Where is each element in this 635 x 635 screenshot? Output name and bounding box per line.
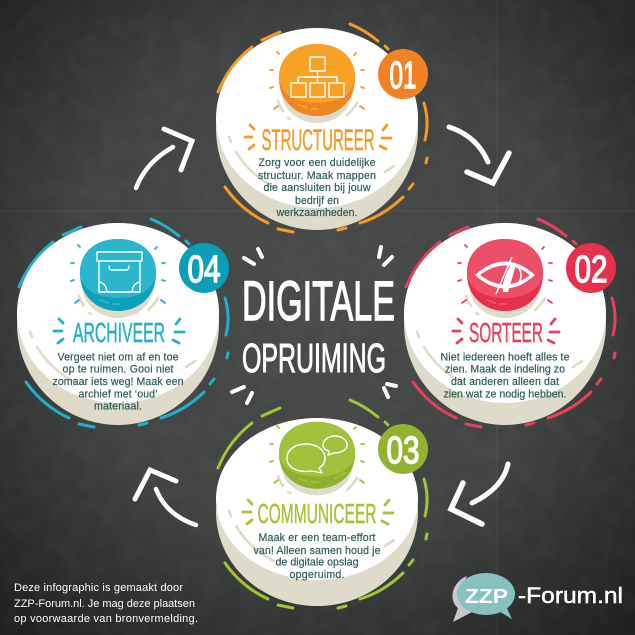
arrow: bottom right (451, 464, 508, 524)
plate (404, 223, 606, 425)
plate marks (229, 101, 394, 187)
heading rays (243, 500, 393, 524)
orange dashed ring (218, 24, 427, 232)
red dashed ring (406, 219, 615, 427)
logo text: ZZP (465, 586, 508, 608)
title: DIGITALE (242, 269, 395, 332)
logo bubble (452, 573, 515, 622)
red rays (458, 245, 552, 303)
green rays (270, 426, 364, 483)
text: structureer: die aansluiten bij jouw (264, 182, 371, 194)
badge 02: 02 (574, 249, 608, 291)
plate (17, 223, 219, 425)
text: communiceer: de digitale opslag (276, 556, 359, 568)
badge 03: 03 (386, 430, 420, 472)
panel: archiveer (17, 219, 229, 427)
red button icon (467, 239, 543, 318)
heading: sorteer: SORTEER (469, 317, 543, 348)
arrow: top right (449, 127, 509, 183)
logo text: -Forum.nl (518, 583, 623, 608)
text: structureer: structuur. Maak mappen (258, 170, 376, 182)
heading rays (453, 319, 559, 343)
title ticks (232, 247, 396, 403)
badge 01: 01 (390, 55, 416, 97)
title: OPRUIMING (242, 335, 386, 381)
text: archiveer: archief met ‘oud’ (78, 388, 158, 400)
text: structureer: werkzaamheden. (276, 207, 358, 219)
plate marks (417, 296, 582, 382)
heading: communiceer: COMMUNICEER (258, 498, 376, 529)
text: communiceer: van! Alleen samen houd je (254, 545, 381, 557)
arrow: top left (136, 129, 192, 188)
title (242, 269, 395, 381)
orange rays (270, 52, 364, 109)
badge 02 (566, 243, 616, 293)
arrow: bottom left (135, 470, 196, 525)
text: structureer: bedrijf en (295, 195, 339, 207)
logo (452, 573, 623, 622)
text: archiveer: materiaal. (94, 400, 142, 412)
heading rays (245, 125, 391, 149)
panel: structureer (216, 24, 428, 232)
text: communiceer: opgeruimd. (290, 569, 344, 581)
heading: archiveer: ARCHIVEER (73, 317, 165, 348)
text: archiveer: zomaar iets weg! Maak een (52, 376, 184, 388)
text: archiveer: op te ruimen. Gooi niet (62, 364, 174, 376)
blue dashed ring (19, 219, 228, 427)
credit text: op voorwaarde van bronvermelding. (14, 613, 198, 625)
text: archiveer: Vergeet niet om af en toe (58, 352, 179, 364)
logo text (465, 583, 623, 608)
green dome (279, 422, 355, 495)
credit text: Deze infographic is gemaakt door (14, 582, 183, 594)
text: sorteer: Niet iedereen hoeft alles te (440, 352, 570, 364)
text: communiceer: Maak er een team-effort (258, 532, 376, 544)
speech bubbles (287, 436, 347, 473)
text: sorteer: zien. Maak de indeling zo (445, 364, 565, 376)
green dashed ring (218, 400, 427, 608)
plate marks (229, 476, 394, 561)
badge 01 (378, 49, 428, 99)
panel: sorteer (404, 219, 616, 427)
plate (216, 28, 418, 230)
plate (216, 418, 418, 606)
blue rays (71, 245, 165, 303)
heading rays (54, 319, 184, 343)
plate marks (30, 296, 195, 382)
text: sorteer: dat anderen alleen dat (451, 376, 559, 388)
badge 04 (179, 243, 229, 293)
panel: communiceer (216, 400, 428, 608)
badge 04: 04 (188, 249, 220, 291)
credit text: ZZP-Forum.nl. Je mag deze plaatsen (14, 598, 195, 610)
text: structureer: Zorg voor een duidelijke (258, 157, 376, 169)
panel: structureer: STRUCTUREER (262, 124, 374, 157)
blue button icon (80, 239, 156, 318)
orange button icon (279, 44, 355, 123)
green button icon (279, 422, 355, 495)
badge 03 (378, 424, 428, 474)
text: sorteer: zien wat ze nodig hebben. (444, 388, 566, 400)
